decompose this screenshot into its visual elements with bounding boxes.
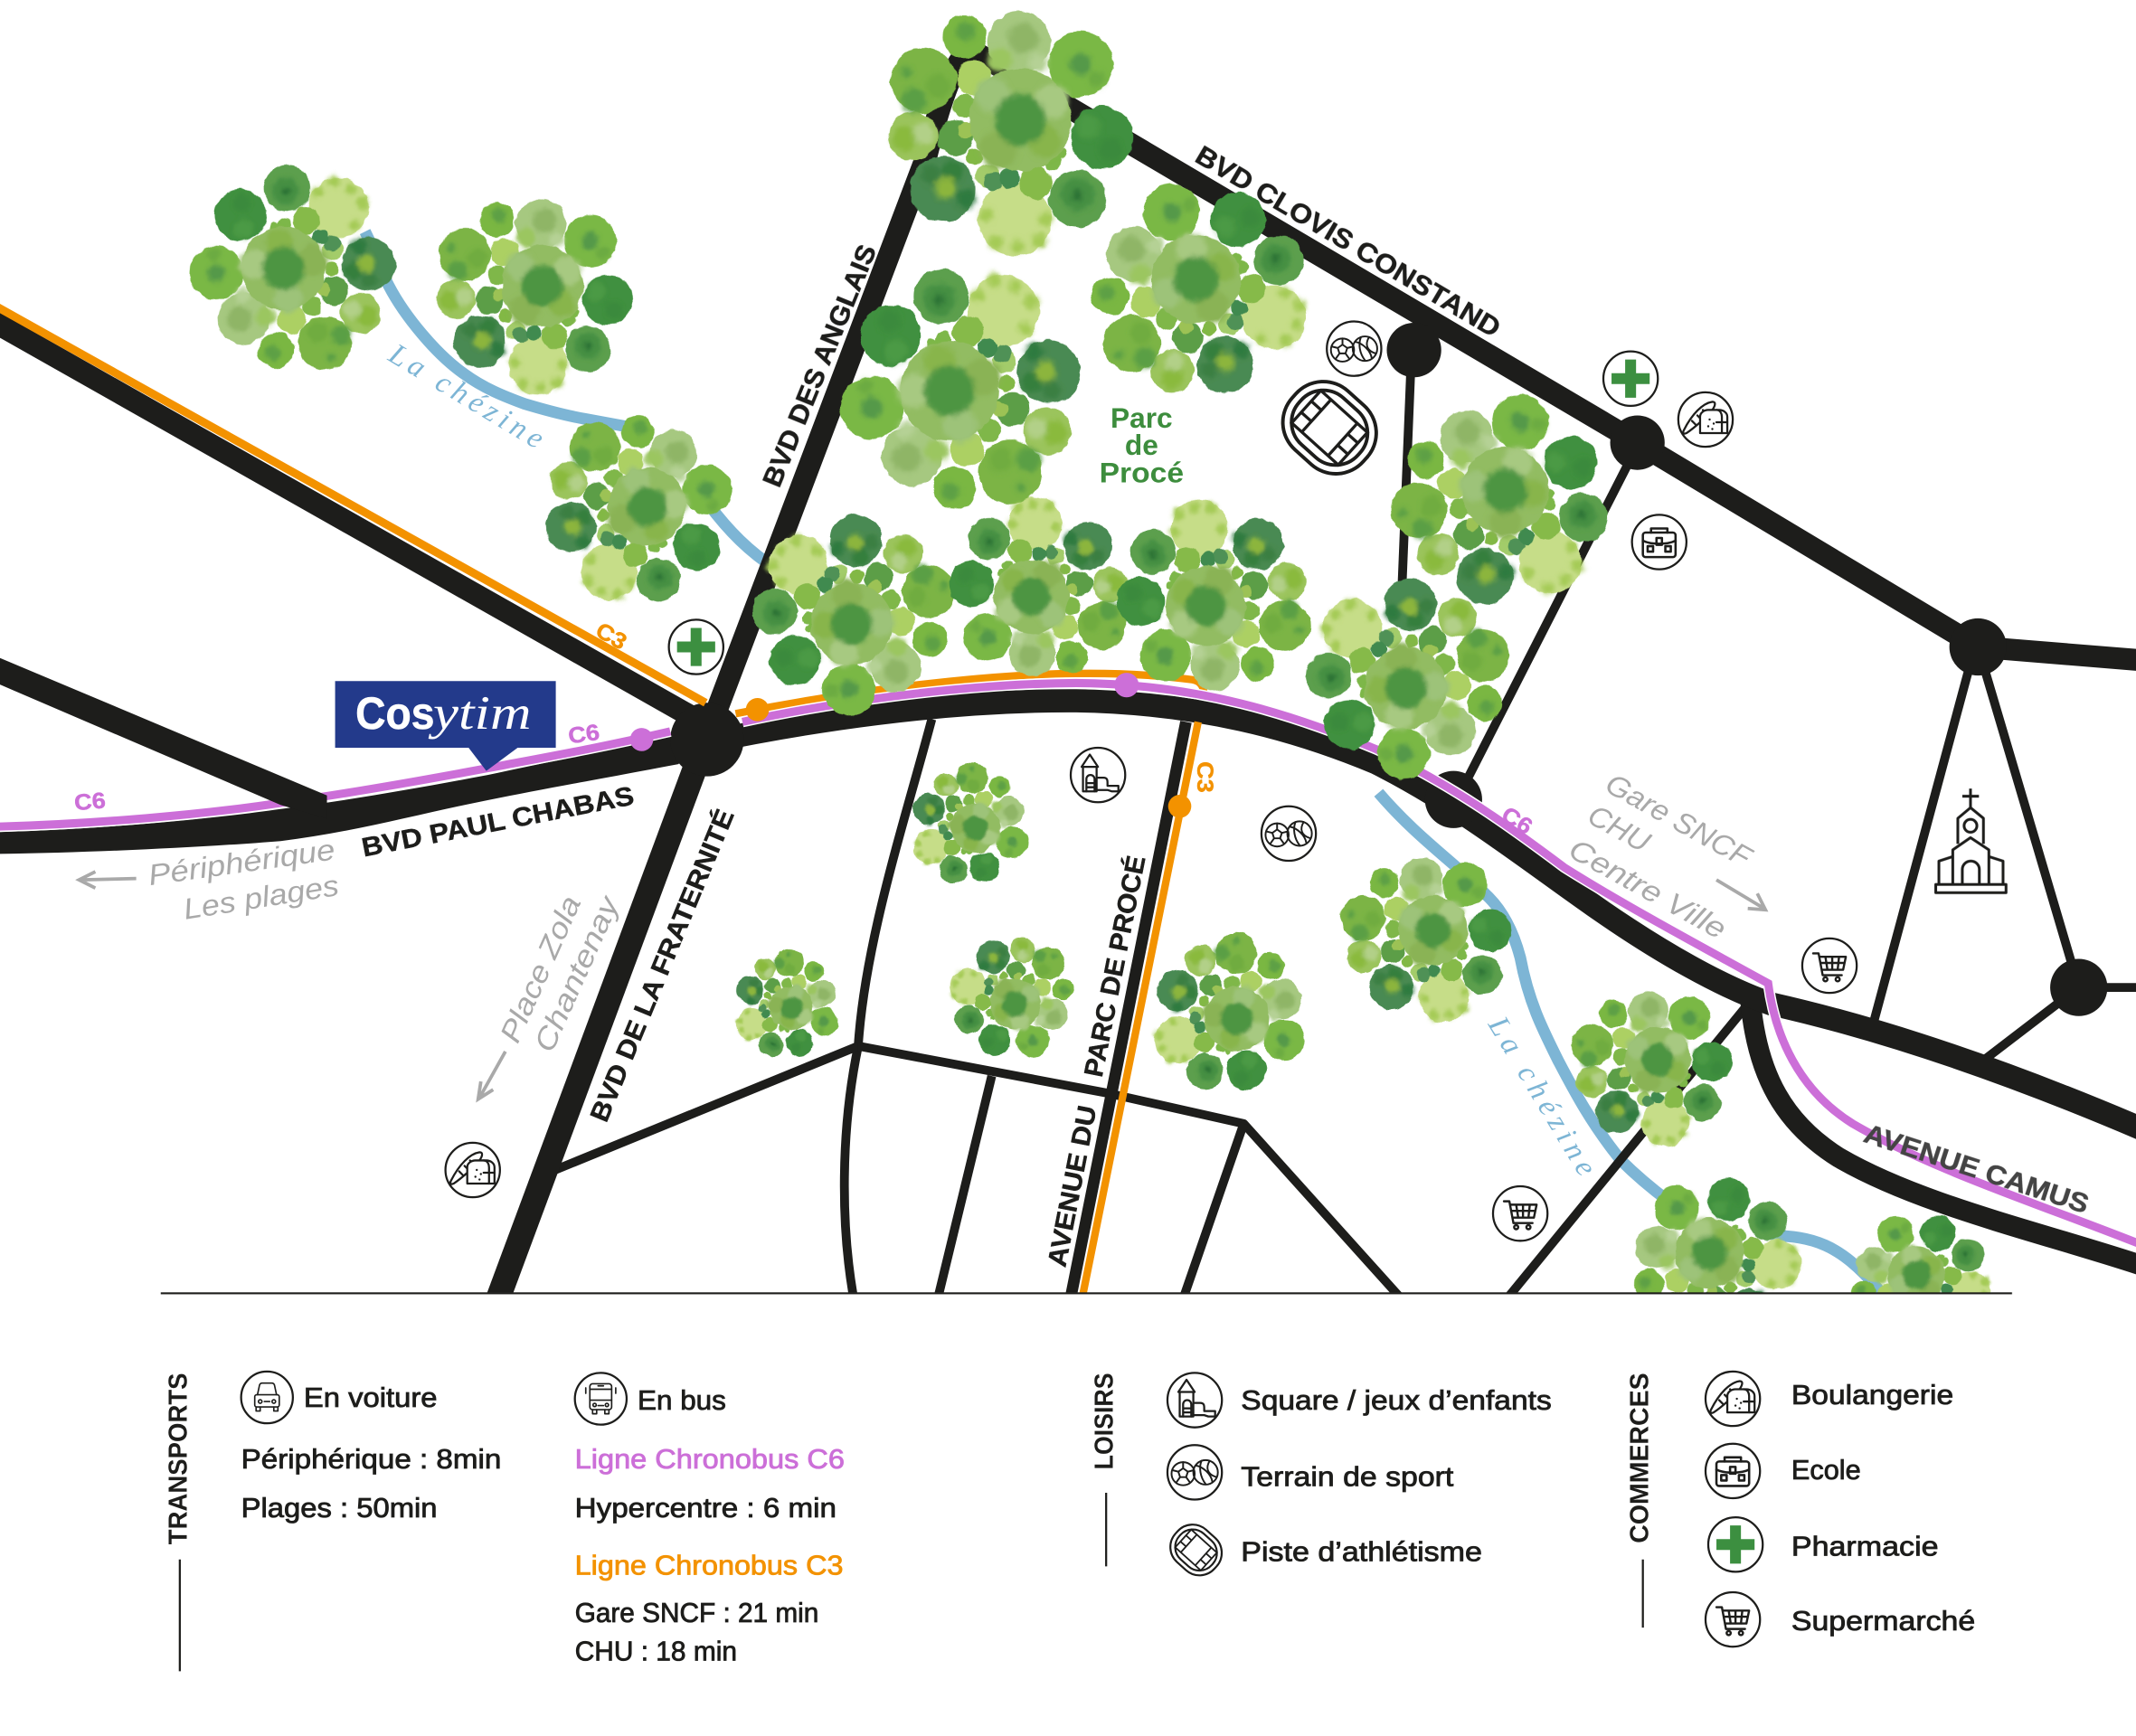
- trees: [155, 11, 2007, 1366]
- park name: [1100, 401, 1184, 488]
- legend item: pharmacy: Pharmacie: [1791, 1530, 1939, 1561]
- directions: [79, 767, 1765, 1099]
- direction: Périphérique, Les plages: Périphérique: [146, 833, 337, 892]
- icon: bakery: [446, 1143, 500, 1197]
- river names: [383, 336, 1603, 1182]
- tag: C6 left: C6: [73, 788, 107, 816]
- legend item: school: [1706, 1444, 1861, 1498]
- icon: athletics track: [1268, 366, 1392, 489]
- secondary streets: [552, 357, 2136, 1301]
- bus line C3: [0, 305, 1205, 1301]
- direction: Place Zola, Chantenay: [478, 890, 626, 1099]
- icon: sports field: [1262, 807, 1316, 861]
- legend item: supermarket: Supermarché: [1791, 1605, 1975, 1637]
- road network: [0, 49, 2136, 1301]
- marker: Cosytim: [336, 681, 556, 771]
- label: La chézine lower: La chézine: [1481, 1010, 1603, 1182]
- street names: [359, 140, 2093, 1269]
- main boulevards: [0, 49, 2136, 1301]
- bus line tags: [73, 618, 1536, 840]
- label: La chézine upper: La chézine: [383, 336, 550, 456]
- icon: pharmacy: [1603, 352, 1658, 406]
- legend item: sports field: Terrain de sport: [1241, 1460, 1454, 1492]
- icon: sports field: [1327, 322, 1381, 376]
- legend item: pharmacy: [1708, 1517, 1939, 1571]
- river: La Chézine: [365, 231, 1880, 1291]
- legend: by car: En voiture: [304, 1382, 438, 1413]
- icon: church: [1936, 788, 2006, 892]
- tag: C3: C3: [591, 618, 630, 655]
- legend item: sports field: [1167, 1445, 1454, 1500]
- tag: C6 near Cosytim: C6: [567, 721, 601, 749]
- direction: Gare SNCF, CHU, Centre Ville: Gare SNCF: [1601, 767, 1759, 874]
- map area: [0, 11, 2136, 1366]
- legend item: supermarket: [1706, 1592, 1975, 1646]
- legend item: bakery: [1706, 1372, 1953, 1426]
- legend: commerces: [1626, 1372, 1975, 1646]
- tag: C6 right: C6: [1497, 803, 1536, 840]
- legend: by bus: Gare SNCF : 21 min: [575, 1597, 818, 1628]
- legend: by car: Périphérique : 8min: [241, 1443, 501, 1475]
- label: Bvd des Anglais: BVD DES ANGLAIS: [758, 241, 883, 491]
- direction: Place Zola, Chantenay: Chantenay: [528, 890, 626, 1057]
- direction: Gare SNCF, CHU, Centre Ville: CHU: [1583, 798, 1656, 859]
- icon: bakery: [1678, 392, 1733, 447]
- legend: by bus: CHU : 18 min: [575, 1635, 737, 1666]
- legend item: bakery: Boulangerie: [1791, 1379, 1953, 1410]
- direction: Périphérique, Les plages: Les plages: [181, 869, 341, 926]
- road junctions: [670, 323, 2107, 1016]
- legend: by bus: Ligne Chronobus C6: [575, 1443, 845, 1475]
- heading: Commerces: COMMERCES: [1626, 1373, 1655, 1543]
- label: Avenue Camus: AVENUE CAMUS: [1860, 1119, 2093, 1220]
- legend: by bus: En bus: [638, 1384, 726, 1416]
- marker: Cosytim: Cos: [355, 688, 435, 739]
- label: Avenue du: AVENUE DU: [1042, 1103, 1102, 1269]
- map icons: [446, 322, 1857, 1241]
- park name: Parc: [1111, 401, 1173, 434]
- direction: Gare SNCF, CHU, Centre Ville: [1564, 767, 1765, 946]
- direction: Place Zola, Chantenay: Place Zola: [494, 891, 587, 1047]
- legend item: playground: [1167, 1373, 1552, 1428]
- legend: by bus: [575, 1373, 845, 1666]
- icon: supermarket: [1493, 1186, 1547, 1241]
- bus line C6: [0, 683, 2136, 1246]
- icon: pharmacy: [669, 619, 723, 675]
- heading: Transports: TRANSPORTS: [164, 1373, 193, 1544]
- legend: loisirs: [1091, 1373, 1552, 1584]
- legend item: athletics track: [1162, 1516, 1482, 1584]
- legend item: athletics track: Piste d’athlétisme: [1241, 1535, 1482, 1567]
- map bottom rule: [161, 1292, 2012, 1294]
- label: Bvd de la Fraternité: BVD DE LA FRATERNITÉ: [583, 805, 741, 1126]
- label: Bvd Paul Chabas: BVD PAUL CHABAS: [359, 781, 637, 863]
- marker: Cosytim: ytim: [428, 687, 531, 740]
- legend: by car: Plages : 50min: [241, 1492, 438, 1524]
- label: Bvd Clovis Constand: BVD CLOVIS CONSTAND: [1190, 140, 1506, 344]
- legend: by bus: Ligne Chronobus C3: [575, 1549, 843, 1580]
- legend: transports: [164, 1372, 845, 1671]
- road: lower-left branch: [0, 656, 327, 818]
- legend: by car: [241, 1372, 501, 1524]
- legend item: school: Ecole: [1791, 1454, 1861, 1486]
- icon: school: [1632, 514, 1687, 570]
- legend: by bus: Hypercentre : 6 min: [575, 1492, 836, 1524]
- tag: C3 vertical: C3: [1192, 761, 1216, 793]
- legend item: playground: Square / jeux d’enfants: [1241, 1384, 1552, 1416]
- park name: Procé: [1100, 456, 1184, 488]
- label: Parc de Procé: PARC DE PROCÉ: [1078, 853, 1152, 1080]
- bus stops: [630, 673, 1191, 818]
- icon: supermarket: [1802, 939, 1857, 993]
- icon: playground: [1071, 748, 1125, 802]
- heading: Loisirs: LOISIRS: [1091, 1373, 1120, 1469]
- direction: Périphérique, Les plages: [79, 833, 341, 926]
- park name: de: [1125, 429, 1158, 461]
- direction: Gare SNCF, CHU, Centre Ville: Centre Ville: [1564, 833, 1732, 946]
